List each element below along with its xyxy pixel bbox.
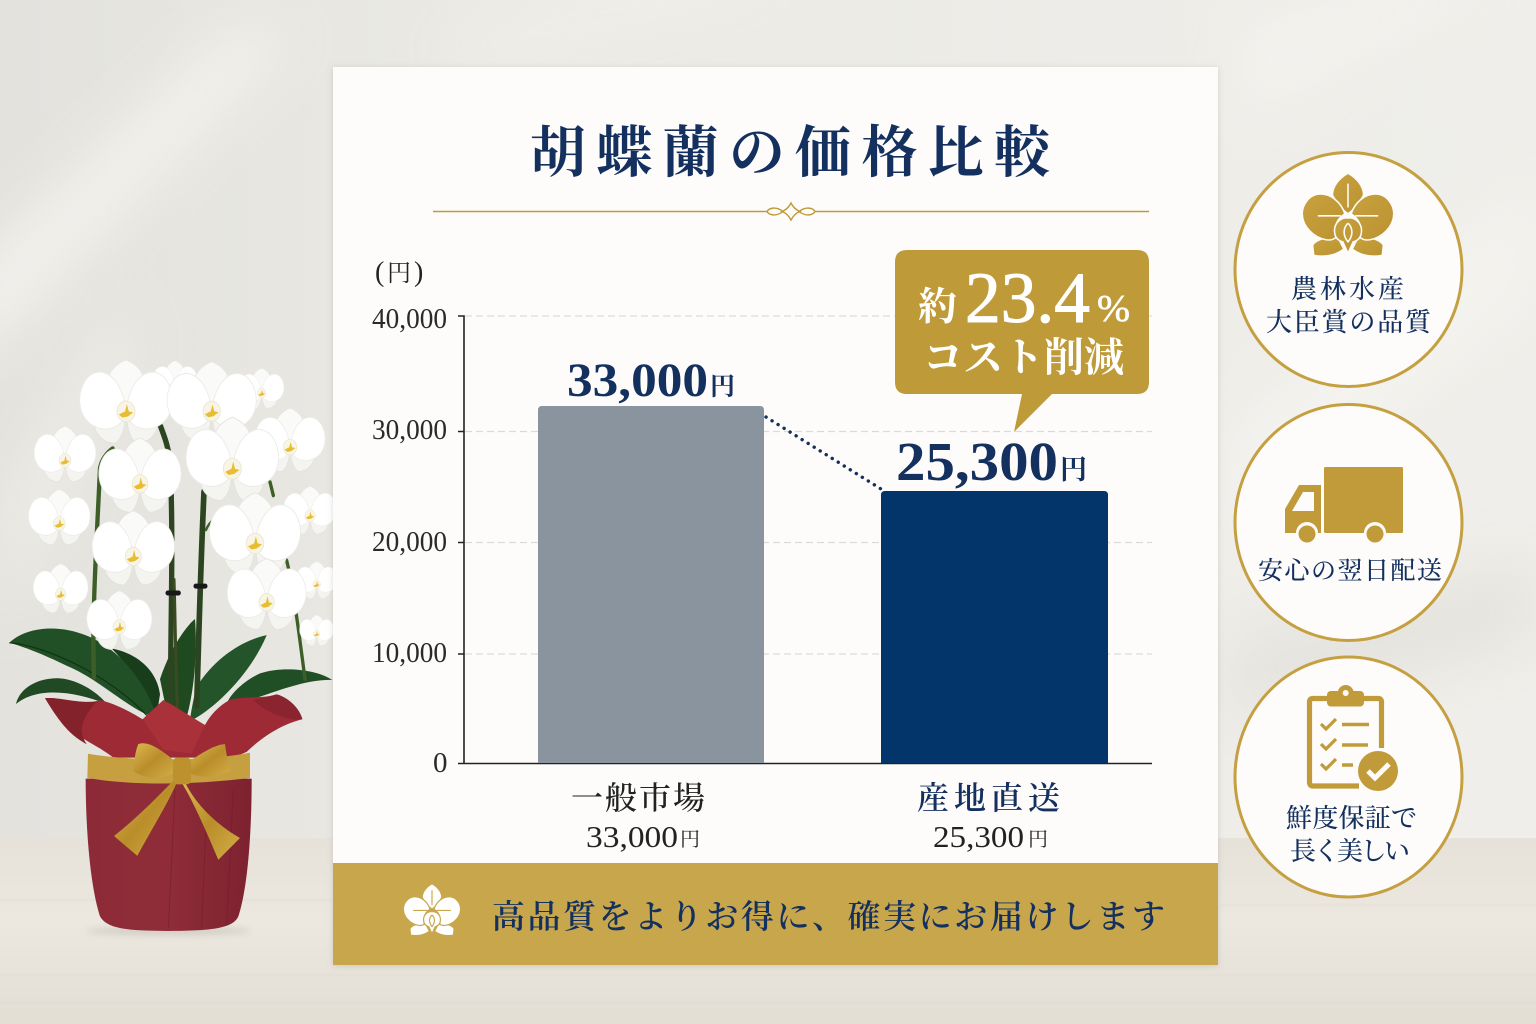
- orchid flowers: [29, 360, 337, 650]
- badge: freshness guarantee: [1235, 657, 1462, 897]
- icon: truck: [1285, 467, 1403, 544]
- icon: gold orchid: [1302, 173, 1394, 256]
- category: direct from farm: 産地直送: [917, 773, 1060, 819]
- badge: award quality: 大臣賞の品質: [1266, 302, 1433, 339]
- value label 33,000: 円: [710, 367, 735, 403]
- value label 25,300: 25,300: [896, 431, 1058, 492]
- dotted connector: [766, 417, 881, 489]
- y axis labels: 30,000: [372, 414, 447, 446]
- icon: clipboard: [1310, 685, 1400, 793]
- gold ribbon and bow: [87, 743, 250, 860]
- potted white orchid: [9, 360, 337, 935]
- category: general market: 33,000: [586, 819, 678, 854]
- value label 33,000: 33,000: [567, 354, 708, 407]
- callout: 23.4: [965, 258, 1090, 338]
- callout: コスト削減: [923, 326, 1124, 383]
- title: 胡蝶蘭の価格比較: [530, 109, 1054, 189]
- bar: direct from farm: [881, 491, 1108, 763]
- orchid back flowers: [153, 361, 284, 409]
- badge text: 農林水産: [1291, 269, 1404, 306]
- bar: general market: [538, 406, 764, 763]
- y axis unit: (: [375, 257, 384, 288]
- orchid stems: [93, 427, 305, 706]
- category: general market: 円: [680, 823, 700, 852]
- icon: white orchid: [403, 884, 461, 936]
- badge text: 鮮度保証で: [1286, 798, 1417, 835]
- callout: 約: [918, 276, 957, 332]
- bar chart: [372, 250, 1152, 854]
- category: general market: [571, 773, 705, 854]
- callout: %: [1097, 288, 1130, 330]
- y axis labels: 0: [433, 747, 448, 779]
- pot wrapping: [86, 779, 252, 931]
- category: general market: 一般市場: [571, 773, 705, 819]
- axes: [458, 316, 1152, 764]
- y axis unit: ): [414, 257, 423, 288]
- y axis labels: 10,000: [372, 637, 447, 669]
- category: direct from farm: 円: [1028, 823, 1048, 852]
- y axis unit: [375, 253, 423, 288]
- category: direct from farm: 25,300: [933, 819, 1024, 854]
- footer band: [333, 863, 1218, 965]
- soft shadow under pot: [85, 927, 252, 935]
- y axis labels: 40,000: [372, 303, 447, 335]
- callout: [895, 250, 1149, 432]
- y axis unit: 円: [387, 253, 411, 288]
- category: direct from farm: [917, 773, 1060, 854]
- orchid leaves: [9, 619, 332, 721]
- comparison panel: [333, 67, 1218, 965]
- y axis labels: 20,000: [372, 526, 447, 558]
- table surface: [0, 838, 1536, 1024]
- badge text: 安心の翌日配送: [1258, 551, 1442, 587]
- footer message: 高品質をよりお得に、確実にお届けします: [492, 891, 1165, 938]
- badge: next-day delivery: [1235, 404, 1462, 640]
- badge: freshness guarantee: 長く美しい: [1290, 831, 1410, 868]
- ornament divider: [433, 203, 1149, 220]
- grid lines: [465, 316, 1152, 654]
- badge: award quality: [1235, 152, 1462, 386]
- value label 25,300: 円: [1060, 448, 1087, 487]
- y axis labels: [372, 303, 448, 779]
- paper collar: [45, 694, 302, 758]
